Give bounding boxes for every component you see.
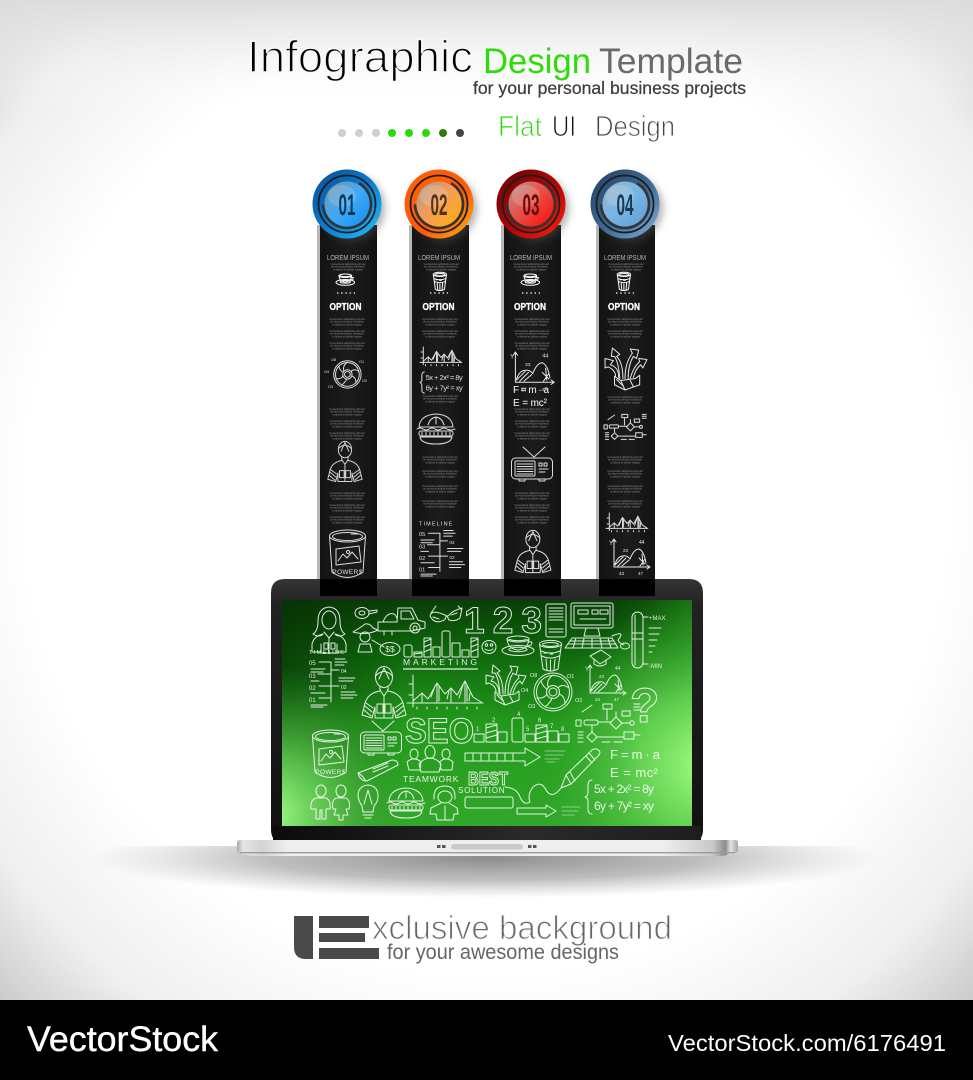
text blocks: Consectetur adipiscing elit sed — [514, 515, 550, 519]
subtitle: Flat UI Design: Flat — [498, 111, 542, 143]
icon: paper cup — [433, 272, 446, 291]
text blocks: Consectetur adipiscing elit sed — [329, 329, 365, 333]
heading: LOREM IPSUM — [510, 253, 552, 262]
text blocks — [422, 317, 458, 338]
text block: Consectetur adipiscing elit sed — [422, 394, 458, 398]
text blocks: ut labore et dolore magna — [425, 474, 455, 478]
text blocks: do eiusmod tempor incididunt — [515, 422, 549, 426]
doodle: force equation: F = m · a — [610, 747, 661, 762]
text blocks: Consectetur adipiscing elit sed — [422, 469, 458, 473]
option label: OPTION — [514, 301, 546, 313]
subtitle: Flat UI Design: UI — [552, 111, 576, 143]
text blocks — [514, 407, 550, 440]
icon: TV — [512, 447, 552, 481]
text blocks: do eiusmod tempor incididunt — [608, 487, 642, 491]
text blocks: ut labore et dolore magna — [610, 322, 640, 326]
heading: LOREM IPSUM — [418, 253, 460, 262]
doodle: numbered bars: 6 — [538, 718, 542, 724]
text blocks: Consectetur adipiscing elit sed — [607, 499, 643, 503]
doodle: eraser — [358, 760, 398, 781]
text blocks: ut labore et dolore magna — [332, 424, 362, 428]
panel: option 2 — [404, 170, 477, 596]
text blocks: Consectetur adipiscing elit sed — [422, 455, 458, 459]
text blocks: ut labore et dolore magna — [610, 474, 640, 478]
text blocks: do eiusmod tempor incididunt — [515, 518, 549, 522]
option label: OPTION — [608, 301, 640, 313]
panel: option 4 — [590, 170, 663, 596]
text blocks — [607, 455, 643, 508]
strip body — [504, 225, 561, 596]
heading: LOREM IPSUM — [604, 253, 646, 262]
title — [247, 33, 746, 98]
strip shadow — [501, 225, 504, 579]
doodle: TEAMWORK label: TEAMWORK — [403, 774, 459, 784]
text block: do eiusmod tempor incididunt — [423, 397, 457, 401]
text blocks: do eiusmod tempor incididunt — [423, 332, 457, 336]
text blocks: Consectetur adipiscing elit sed — [607, 455, 643, 459]
text blocks: do eiusmod tempor incididunt — [515, 410, 549, 414]
badge 04: 04 — [616, 189, 634, 222]
text blocks: Consectetur adipiscing elit sed — [422, 484, 458, 488]
text blocks: Consectetur adipiscing elit sed — [514, 329, 550, 333]
equations — [420, 372, 463, 393]
title: Infographic — [247, 33, 473, 82]
doodle: teamwork — [407, 746, 453, 772]
doodle: wheel chart: O2 — [575, 698, 582, 704]
doodle: small lines — [545, 751, 580, 815]
doodle: person with headset — [430, 786, 458, 820]
title: Template — [599, 42, 743, 81]
option label: OPTION — [422, 301, 454, 313]
text blocks: Consectetur adipiscing elit sed — [329, 515, 365, 519]
text block: do eiusmod tempor incididunt — [609, 265, 643, 269]
badge 01: 01 — [338, 189, 356, 222]
strip body — [320, 225, 377, 596]
text block: ut labore et dolore magna — [610, 400, 640, 404]
text blocks — [514, 491, 550, 524]
text blocks: Consectetur adipiscing elit sed — [607, 469, 643, 473]
text blocks: do eiusmod tempor incididunt — [330, 506, 364, 510]
doodle: MARKETING label: MARKETING — [403, 657, 478, 667]
text block: ut labore et dolore magna — [426, 267, 456, 271]
laptop chin — [273, 826, 701, 841]
text blocks: do eiusmod tempor incididunt — [330, 518, 364, 522]
doodle: curve graph — [585, 665, 626, 702]
panel: option 1 — [312, 170, 385, 596]
doodle: numbered bars: 2 — [492, 718, 496, 724]
badge 03 — [496, 170, 569, 241]
text blocks: do eiusmod tempor incididunt — [515, 506, 549, 510]
title: for your personal business projects — [473, 78, 746, 98]
tagline — [372, 909, 672, 964]
text blocks: ut labore et dolore magna — [332, 412, 362, 416]
text blocks: ut labore et dolore magna — [425, 334, 455, 338]
text blocks: do eiusmod tempor incididunt — [423, 472, 457, 476]
heading: LOREM IPSUM — [327, 253, 369, 262]
doodle: wheel chart: O1 — [567, 674, 574, 680]
text blocks: ut labore et dolore magna — [517, 334, 547, 338]
text blocks: ut labore et dolore magna — [517, 436, 547, 440]
laptop base — [237, 840, 738, 856]
icon: graph — [510, 352, 554, 393]
text block: ut labore et dolore magna — [516, 267, 546, 271]
text blocks: do eiusmod tempor incididunt — [608, 458, 642, 462]
doodle: couple — [311, 785, 350, 820]
text blocks: ut labore et dolore magna — [332, 334, 362, 338]
strip shadow — [596, 225, 599, 579]
text blocks: ut labore et dolore magna — [517, 424, 547, 428]
doodle: mountain chart — [407, 675, 483, 709]
text blocks — [422, 455, 458, 508]
text blocks: do eiusmod tempor incididunt — [423, 487, 457, 491]
text blocks — [329, 491, 365, 524]
tagline: xclusive background — [372, 909, 672, 946]
doodle: dollar sign oval: $$ — [385, 644, 395, 654]
text blocks: ut labore et dolore magna — [610, 504, 640, 508]
overlap shade — [412, 579, 469, 596]
doodle: computer — [565, 603, 630, 649]
doodle: sunglasses — [430, 606, 462, 622]
icon: arrows box — [605, 348, 647, 390]
strip body — [412, 225, 469, 596]
screen doodles — [309, 600, 666, 820]
text blocks: Consectetur adipiscing elit sed — [329, 491, 365, 495]
doodle: big arrow — [465, 748, 540, 766]
doodle: arrows box — [486, 665, 526, 705]
badge 02: 02 — [430, 189, 448, 222]
overlap shade — [320, 579, 377, 596]
overlap shade — [599, 579, 655, 596]
rating stars — [522, 292, 540, 294]
text block: do eiusmod tempor incididunt — [514, 265, 548, 269]
text blocks: do eiusmod tempor incididunt — [608, 502, 642, 506]
badge 03: 03 — [522, 189, 540, 222]
text block: Consectetur adipiscing elit sed — [608, 262, 644, 266]
text blocks: Consectetur adipiscing elit sed — [422, 317, 458, 321]
icon: timeline — [419, 522, 465, 576]
text blocks: Consectetur adipiscing elit sed — [422, 499, 458, 503]
text blocks: do eiusmod tempor incididunt — [608, 332, 642, 336]
text block: Consectetur adipiscing elit sed — [423, 262, 459, 266]
strip body — [599, 225, 655, 596]
text blocks: Consectetur adipiscing elit sed — [514, 431, 550, 435]
text blocks: do eiusmod tempor incididunt — [515, 320, 549, 324]
text blocks: ut labore et dolore magna — [517, 322, 547, 326]
doodle: magnifier — [355, 608, 377, 618]
text blocks — [329, 317, 365, 350]
doodle: thermometer — [632, 612, 666, 670]
doodle: energy equation: E = mc² — [610, 765, 659, 780]
logo: letter E — [294, 916, 379, 959]
doodle: person with hat — [353, 624, 384, 652]
text blocks: ut labore et dolore magna — [517, 346, 547, 350]
text blocks: Consectetur adipiscing elit sed — [329, 341, 365, 345]
icon: flowchart — [604, 414, 646, 439]
text blocks — [607, 317, 643, 338]
text block: ut labore et dolore magna — [333, 267, 363, 271]
text blocks: Consectetur adipiscing elit sed — [514, 491, 550, 495]
text blocks: ut labore et dolore magna — [425, 460, 455, 464]
icon: man — [328, 441, 362, 482]
text blocks: do eiusmod tempor incididunt — [330, 332, 364, 336]
doodle: numbered bars: 1 — [476, 727, 480, 733]
doodle: TV — [360, 721, 402, 755]
text blocks: do eiusmod tempor incididunt — [330, 410, 364, 414]
subtitle: Flat UI Design: Design — [595, 111, 675, 143]
rating stars — [616, 292, 634, 294]
doodle: light bulb — [358, 785, 378, 818]
text blocks: Consectetur adipiscing elit sed — [607, 484, 643, 488]
text blocks: Consectetur adipiscing elit sed — [422, 329, 458, 333]
text blocks: ut labore et dolore magna — [517, 496, 547, 500]
doodle: smiley — [482, 640, 496, 654]
icon: coffee cup — [336, 274, 355, 285]
text block: Consectetur adipiscing elit sed — [607, 395, 643, 399]
rating stars — [337, 292, 355, 294]
text blocks: ut labore et dolore magna — [517, 508, 547, 512]
text blocks: do eiusmod tempor incididunt — [423, 502, 457, 506]
text blocks: do eiusmod tempor incididunt — [608, 320, 642, 324]
text blocks: Consectetur adipiscing elit sed — [514, 341, 550, 345]
icon: chart — [420, 347, 462, 366]
doodle: BEST SOLUTION: SOLUTION — [458, 786, 505, 795]
footer brand: VectorStock — [27, 1020, 219, 1059]
icon: wheel: O4 — [324, 370, 329, 374]
screen — [282, 600, 692, 826]
text blocks: do eiusmod tempor incididunt — [330, 422, 364, 426]
doodle: equations — [585, 780, 654, 814]
text block: ut labore et dolore magna — [425, 399, 455, 403]
icon: wheel: O1 — [359, 360, 364, 364]
text blocks: ut labore et dolore magna — [332, 520, 362, 524]
text blocks: ut labore et dolore magna — [517, 412, 547, 416]
text blocks: do eiusmod tempor incididunt — [423, 458, 457, 462]
doodle: woman — [312, 607, 346, 653]
title: Design — [483, 42, 591, 81]
badge 02 — [404, 170, 477, 241]
icon: graph — [609, 539, 650, 576]
text blocks: Consectetur adipiscing elit sed — [514, 407, 550, 411]
doodle: wheel chart: O3 — [528, 704, 535, 710]
doodle: man — [362, 666, 406, 718]
doodle: numbers 123: 123 — [464, 600, 542, 641]
text blocks: do eiusmod tempor incididunt — [515, 344, 549, 348]
doodle: BEST SOLUTION — [458, 769, 513, 808]
doodle: burger — [387, 788, 425, 818]
text block: do eiusmod tempor incididunt — [608, 398, 642, 402]
doodle: graduation cap — [590, 650, 611, 666]
icon: can — [330, 530, 366, 578]
text block: Consectetur adipiscing elit sed — [330, 262, 366, 266]
text block: do eiusmod tempor incididunt — [424, 265, 458, 269]
progress dots — [338, 129, 464, 137]
text block: Consectetur adipiscing elit sed — [513, 262, 549, 266]
footer bar — [0, 1000, 973, 1080]
text blocks: do eiusmod tempor incididunt — [515, 434, 549, 438]
text blocks: do eiusmod tempor incididunt — [330, 320, 364, 324]
text blocks: ut labore et dolore magna — [517, 520, 547, 524]
doodle: wheel chart: O8 — [530, 673, 537, 679]
doodle: coffee cup — [502, 636, 534, 656]
laptop — [237, 579, 738, 856]
equation: energy: E = mc² — [513, 398, 548, 409]
text blocks: ut labore et dolore magna — [610, 489, 640, 493]
equation: force: F = m · a — [513, 385, 549, 396]
doodle: bar chart — [404, 631, 478, 657]
doodle: wheel chart — [521, 673, 582, 711]
doodle: numbered bars: 5 — [526, 727, 530, 733]
icon: burger — [417, 414, 455, 444]
floor shadow — [120, 846, 852, 896]
doodle: flowchart — [576, 704, 640, 742]
text blocks: ut labore et dolore magna — [332, 508, 362, 512]
text blocks: Consectetur adipiscing elit sed — [607, 329, 643, 333]
text blocks: Consectetur adipiscing elit sed — [329, 419, 365, 423]
icon: coffee cup — [521, 274, 540, 285]
text blocks: Consectetur adipiscing elit sed — [607, 317, 643, 321]
doodle: numbered bars: 4 — [517, 712, 521, 718]
text blocks: Consectetur adipiscing elit sed — [514, 317, 550, 321]
text blocks: do eiusmod tempor incididunt — [330, 494, 364, 498]
text blocks: ut labore et dolore magna — [425, 322, 455, 326]
text blocks: ut labore et dolore magna — [610, 460, 640, 464]
doodle: dollar sign oval — [380, 642, 400, 656]
icon: wheel — [324, 358, 367, 389]
strip shadow — [409, 225, 412, 579]
doodle: pencil and squiggle — [505, 749, 600, 803]
icon: wheel: O8 — [331, 358, 336, 362]
overlap shade — [504, 579, 561, 596]
doodle: paper cup — [540, 640, 562, 671]
text blocks: Consectetur adipiscing elit sed — [514, 503, 550, 507]
text blocks: ut labore et dolore magna — [425, 489, 455, 493]
doodle: PC tower — [546, 604, 566, 637]
doodle: thermometer: -MIN — [649, 664, 662, 670]
text blocks: do eiusmod tempor incididunt — [515, 332, 549, 336]
badge 01 — [312, 170, 385, 241]
doodle: wheel chart: O4 — [521, 688, 528, 694]
text blocks: Consectetur adipiscing elit sed — [329, 407, 365, 411]
text blocks — [514, 317, 550, 350]
text blocks: ut labore et dolore magna — [332, 322, 362, 326]
icon: paper cup — [617, 272, 630, 291]
text blocks: do eiusmod tempor incididunt — [515, 494, 549, 498]
icon: wheel: O3 — [328, 385, 333, 389]
doodle: question mark: ? — [630, 680, 659, 733]
text blocks: ut labore et dolore magna — [332, 436, 362, 440]
doodle: truck — [378, 608, 425, 635]
doodle: small arrow — [517, 805, 556, 817]
text blocks: Consectetur adipiscing elit sed — [514, 419, 550, 423]
doodle: SEO: SEO — [405, 712, 474, 751]
text blocks: do eiusmod tempor incididunt — [423, 320, 457, 324]
text blocks: do eiusmod tempor incididunt — [608, 472, 642, 476]
text blocks: Consectetur adipiscing elit sed — [329, 503, 365, 507]
text blocks — [329, 407, 365, 440]
text blocks: ut labore et dolore magna — [425, 504, 455, 508]
icon: chart — [606, 513, 648, 532]
rating stars — [430, 292, 448, 294]
text blocks: Consectetur adipiscing elit sed — [329, 317, 365, 321]
text blocks: ut labore et dolore magna — [610, 334, 640, 338]
doodle: numbered bars — [474, 712, 569, 742]
doodle: thermometer: +MAX — [649, 616, 666, 622]
text block: ut labore et dolore magna — [611, 267, 641, 271]
text block: do eiusmod tempor incididunt — [331, 265, 365, 269]
doodle: timeline — [309, 650, 357, 707]
doodle: numbered bars: 7 — [550, 724, 554, 730]
subtitle: Flat UI Design — [498, 111, 675, 143]
panel: option 3 — [496, 170, 569, 596]
text blocks: ut labore et dolore magna — [332, 346, 362, 350]
strip shadow — [317, 225, 320, 579]
badge 04 — [590, 170, 663, 241]
option label: OPTION — [330, 301, 362, 313]
text blocks: do eiusmod tempor incididunt — [330, 434, 364, 438]
tagline: for your awesome designs — [387, 941, 619, 964]
text blocks: do eiusmod tempor incididunt — [330, 344, 364, 348]
icon: man — [515, 530, 551, 573]
doodle: BEST SOLUTION: BEST — [468, 769, 508, 789]
text blocks: Consectetur adipiscing elit sed — [329, 431, 365, 435]
laptop lid — [271, 579, 703, 841]
footer url: VectorStock.com/6176491 — [668, 1030, 946, 1056]
doodle: can — [312, 730, 348, 778]
icon: wheel: O2 — [362, 379, 367, 383]
text blocks: ut labore et dolore magna — [332, 496, 362, 500]
doodle: numbered bars: 8 — [561, 727, 565, 733]
